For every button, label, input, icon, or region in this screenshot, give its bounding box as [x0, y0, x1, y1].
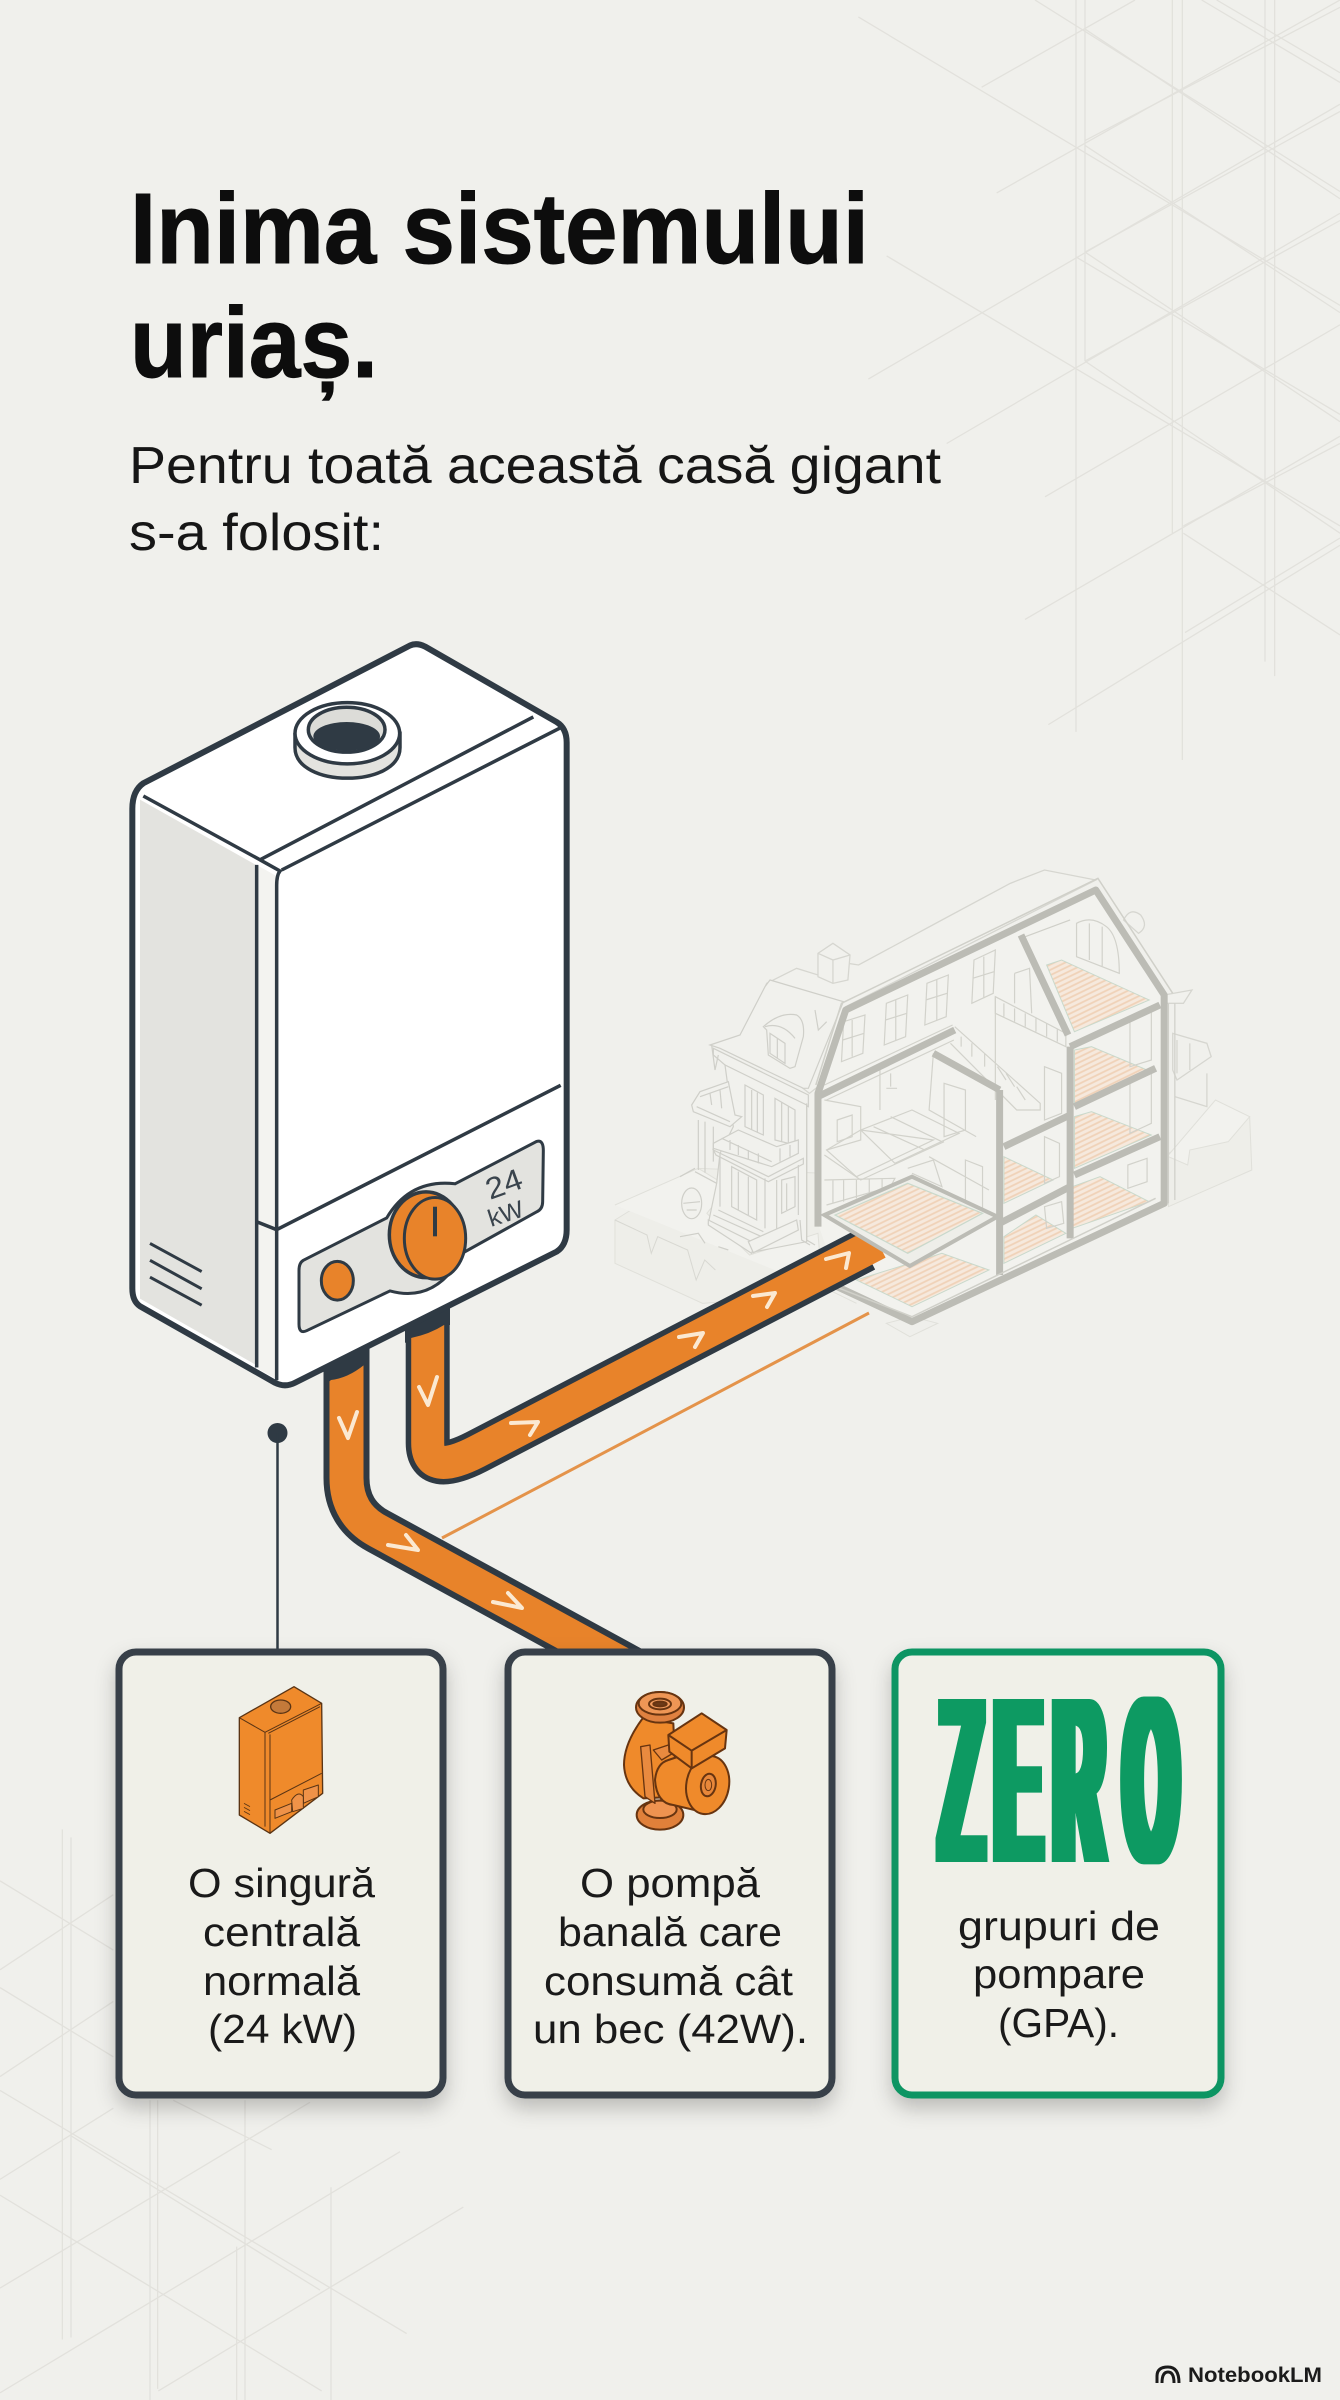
card text: grupuri de: [958, 1903, 1160, 1949]
card text: consumă cât: [544, 1958, 794, 2004]
icon: circulation pump: [624, 1692, 734, 1830]
lower floor plates with heating coils: [856, 960, 1151, 1307]
boiler power label: 24: [481, 1163, 527, 1207]
flow arrows on pipes: [339, 1253, 849, 1608]
house front floor plate over the pipe end: [824, 1177, 997, 1266]
card text: O singură: [188, 1860, 375, 1906]
icon: boiler: [239, 1687, 323, 1833]
card text: banală care: [558, 1909, 782, 1955]
interior details: [824, 920, 1175, 1228]
card: pump: [508, 1652, 832, 2095]
pipe: supply line to house: [428, 1243, 878, 1462]
card text: pompare: [973, 1951, 1145, 1997]
boiler power label: kW: [485, 1196, 527, 1233]
title: [130, 173, 869, 401]
leader line with dot: [268, 1423, 288, 1652]
logo: NotebookLM: NotebookLM: [1188, 2364, 1322, 2387]
boiler power label: [481, 1163, 527, 1233]
card: zero GPA: [895, 1647, 1221, 2095]
subtitle: s-a folosit:: [129, 504, 384, 562]
snowy ground block: [615, 1100, 1252, 1337]
indicator light: [321, 1261, 353, 1300]
card text: [188, 1860, 375, 2052]
title: uriaș.: [130, 287, 378, 401]
boiler illustration: [132, 644, 567, 1385]
card text: (GPA).: [998, 2000, 1119, 2046]
card text: [958, 1903, 1160, 2046]
illustration: cutaway house with underfloor heating: [615, 870, 1252, 1337]
card text: (24 kW): [208, 2006, 357, 2052]
control panel: [299, 1141, 543, 1332]
subtitle: [129, 437, 942, 562]
knob: [389, 1192, 463, 1278]
pipe: return line to pump: [346, 1340, 640, 1674]
card text: O pompă: [580, 1860, 760, 1906]
vents: [150, 1243, 202, 1305]
subtitle: Pentru toată această casă gigant: [129, 437, 942, 495]
card text: normală: [203, 1958, 360, 2004]
section interior: [818, 890, 1164, 1320]
card text: un bec (42W).: [533, 2006, 808, 2052]
card text: centrală: [203, 1909, 360, 1955]
thin orange connection line: [442, 1313, 869, 1538]
card: boiler: [119, 1652, 443, 2095]
pipe collars: [324, 1300, 450, 1386]
title: Inima sistemului: [130, 173, 869, 285]
section frame: [818, 890, 1164, 1322]
flue: [295, 733, 400, 778]
upper roof and chimney: [741, 870, 1211, 1107]
left facade of the house: [680, 980, 843, 1253]
side face: [140, 800, 256, 1365]
boiler body: [132, 644, 567, 1385]
card text: [533, 1860, 808, 2052]
big number: ZERO: ZERO: [940, 1647, 1178, 1912]
